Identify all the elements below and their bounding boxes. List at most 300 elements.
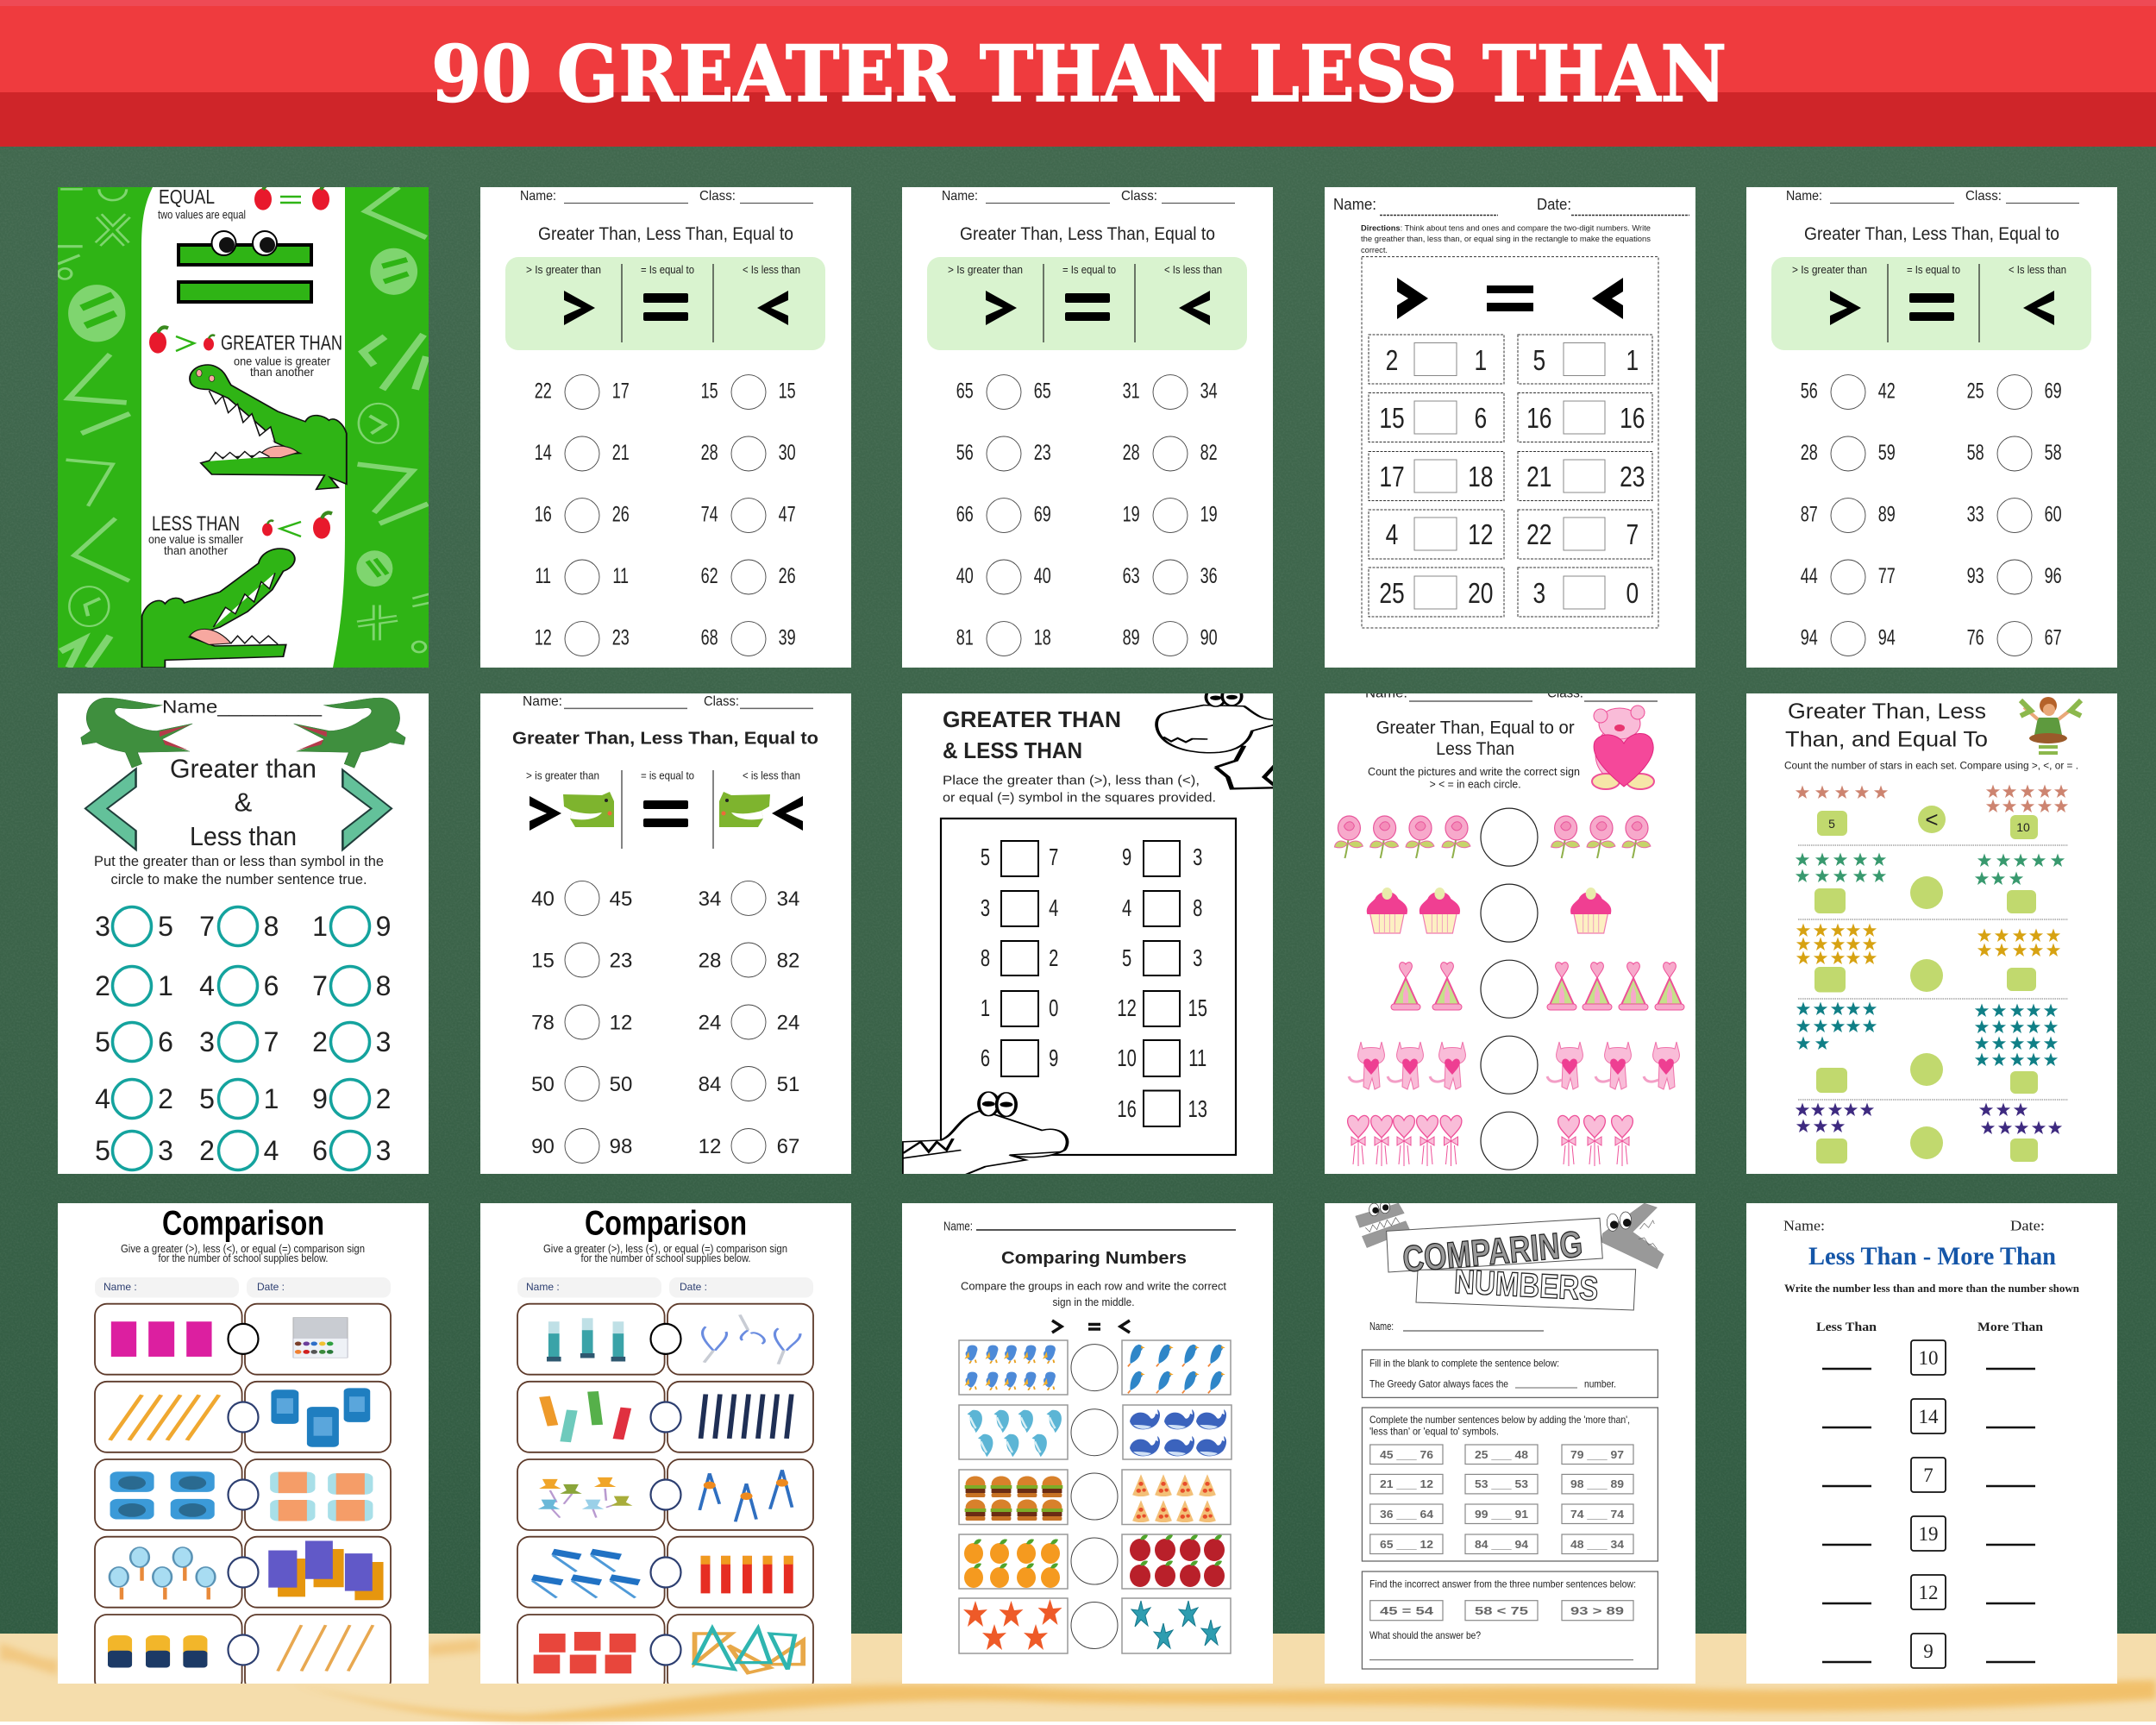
row 4 teal stars [1796, 1002, 2058, 1066]
comparison rows: 6 [312, 1135, 328, 1166]
heading: Greater Than, Less Than, Equal to [1804, 224, 2059, 244]
comparison rows: 21 [612, 440, 630, 465]
name and class line [523, 694, 813, 709]
dashed activity box [1362, 257, 1658, 628]
icon: chevrons [85, 768, 392, 850]
box: number sentences [1362, 1408, 1658, 1561]
row 5 purple stars [1796, 1102, 2062, 1134]
panel: worksheet 1 [480, 187, 851, 668]
box: number sentences: 25 ___ 48 [1475, 1448, 1528, 1461]
comparison rows: 90 [531, 1135, 555, 1158]
instructions: Give a greater (>), less (<), or equal (=) comparison sign [543, 1242, 787, 1255]
dashed activity box: 25 [1379, 578, 1405, 610]
comparison rows: 7 [199, 911, 215, 942]
comparison cards [517, 1304, 813, 1692]
dashed activity box: 17 [1379, 461, 1405, 493]
instructions [1368, 765, 1580, 791]
directions: the greather than, less than, or equal sing in the rectangle to make the equations [1361, 235, 1651, 243]
dashed activity box: 0 [1626, 578, 1639, 610]
answer frame: 6 [981, 1045, 990, 1072]
answer frame: 12 [1117, 995, 1137, 1022]
title: 90 GREATER THAN LESS THAN [431, 28, 1727, 120]
banner with gray alligators [1356, 1201, 1664, 1310]
number boxes [1911, 1340, 1946, 1668]
icon: pink bear with heart [1592, 706, 1654, 789]
directions: Directions: Think about tens and ones and compare the two-digit numbers. Write [1361, 223, 1651, 232]
column headings [1816, 1320, 2044, 1334]
worked example: 10 [2016, 820, 2030, 834]
dashed activity box: 3 [1532, 578, 1545, 610]
comparison rows: 2 [376, 1083, 391, 1114]
worked example [1828, 806, 2030, 834]
comparison rows: 42 [1878, 379, 1896, 403]
comparison rows: 3 [376, 1135, 391, 1166]
comparison rows: 66 [956, 502, 974, 526]
comparison rows: 34 [699, 888, 721, 911]
row 2 green stars [1796, 852, 2065, 885]
comparison rows: 9 [376, 911, 391, 942]
dashed activity box: 5 [1532, 345, 1545, 377]
answer frame: 4 [1122, 895, 1131, 922]
heading [1376, 718, 1575, 759]
comparison rows: 4 [264, 1135, 279, 1166]
box: fill in the blank: The Greedy Gator always faces the [1369, 1378, 1508, 1390]
answer frame: 7 [1049, 844, 1058, 871]
comparison rows: 3 [158, 1135, 173, 1166]
instructions [94, 854, 384, 888]
icons: dolphins and whales [968, 1409, 1226, 1457]
answer circles [228, 1324, 259, 1665]
name and class line: Name: [1365, 686, 1407, 700]
heading: Comparison [585, 1204, 747, 1242]
white central column [141, 187, 345, 668]
comparison rows: 24 [777, 1011, 799, 1035]
name and class line [1786, 189, 2079, 204]
box: number sentences: 74 ___ 74 [1570, 1508, 1625, 1521]
dashed activity box: 18 [1468, 461, 1493, 493]
icons: stars and starfish [963, 1599, 1220, 1650]
comparison rows: 90 [1200, 625, 1218, 649]
name and date line: Date: [1537, 196, 1571, 213]
comparison rows: 44 [1801, 563, 1818, 588]
heading [943, 706, 1121, 763]
icon: top line art crocodile [1156, 687, 1276, 788]
heading: Less Than [1436, 739, 1514, 759]
answer frame: 4 [1049, 895, 1058, 922]
name and class line: Name: [1786, 189, 1822, 204]
dividers [1798, 845, 2068, 1100]
answer frame: 0 [1049, 995, 1058, 1022]
symbol key: < Is less than [2009, 264, 2066, 276]
box: number sentences: 'less than' or 'equal to' symbols. [1369, 1425, 1499, 1437]
wooden table ledge [0, 1634, 2156, 1725]
comparison rows: 26 [779, 563, 796, 588]
less than section: than another [164, 543, 228, 557]
panel: comparing numbers picture groups [902, 1203, 1273, 1684]
comparison rows: 14 [535, 440, 552, 465]
comparison rows: 34 [1200, 379, 1218, 403]
comparison rows: 82 [777, 949, 799, 973]
name and class line: Class: [1547, 686, 1583, 700]
greater than section: one value is greater [234, 354, 330, 367]
comparison rows: 82 [1200, 440, 1218, 465]
heading: Than, and Equal To [1785, 727, 1988, 751]
panel: comparing numbers quiz [1325, 1203, 1695, 1684]
heading: Greater Than, Less Than, Equal to [538, 224, 793, 244]
panel: star counting worksheet [1746, 693, 2117, 1174]
name and class line: Class: [1965, 189, 2002, 204]
answer frame: 11 [1188, 1045, 1206, 1072]
answer tiles and circles [1814, 806, 2038, 1164]
number boxes: 9 [1923, 1640, 1934, 1662]
instructions [943, 773, 1216, 806]
name and date line: Date: [2010, 1218, 2045, 1234]
comparison rows: 12 [610, 1011, 632, 1035]
instructions: Count the pictures and write the correct sign [1368, 765, 1580, 778]
comparison rows: 45 [610, 888, 632, 911]
dashed activity box: 1 [1626, 345, 1639, 377]
comparison rows: 2 [95, 970, 110, 1001]
panel: crocodile single-digit sheet [58, 693, 429, 1174]
comparison rows: 2 [199, 1135, 215, 1166]
greater than section [149, 327, 347, 489]
heading: Comparing Numbers [1001, 1249, 1187, 1268]
comparison rows: 94 [1878, 625, 1896, 649]
comparison rows: 18 [1034, 625, 1051, 649]
comparison rows: 4 [95, 1083, 110, 1114]
box: find the incorrect answer: 45 = 54 [1380, 1604, 1434, 1617]
comparison rows: 40 [1034, 563, 1051, 588]
banner with gray alligators: NUMBERS [1453, 1263, 1599, 1308]
instructions [961, 1280, 1226, 1308]
comparison rows: 28 [1123, 440, 1140, 465]
name and class line [520, 189, 813, 204]
heading: Greater Than, Less [1788, 699, 1986, 724]
directions [1361, 223, 1651, 254]
icons: cats [1349, 1042, 1679, 1089]
comparison rows: 62 [701, 563, 718, 588]
comparison rows: 28 [1801, 440, 1818, 465]
symbol key: > Is greater than [948, 264, 1023, 276]
instructions: sign in the middle. [1052, 1295, 1135, 1308]
answer frame: 15 [1188, 995, 1207, 1022]
comparison rows: 28 [701, 440, 718, 465]
comparison rows: 65 [956, 379, 974, 403]
heading [170, 754, 317, 851]
equal section [158, 184, 331, 302]
name and date line [1333, 196, 1689, 216]
name and date pills: Name : [526, 1281, 560, 1293]
dashed activity box: 16 [1526, 403, 1551, 435]
comparison rows: 30 [779, 440, 796, 465]
comparison rows: 2 [158, 1083, 173, 1114]
instructions [121, 1242, 365, 1264]
comparison rows: 51 [777, 1073, 799, 1096]
heading: Greater Than, Equal to or [1376, 718, 1575, 738]
comparison rows: 56 [1801, 379, 1818, 403]
comparison rows: 8 [376, 970, 391, 1001]
comparison rows: 23 [612, 625, 630, 649]
dashed activity box: 4 [1386, 519, 1398, 551]
answer frame: 9 [1049, 1045, 1058, 1072]
box: find the incorrect answer: What should the answer be? [1369, 1629, 1481, 1641]
instructions: Place the greater than (>), less than (<), [943, 773, 1200, 787]
comparison rows [535, 375, 796, 656]
icon: child figure [2021, 697, 2081, 755]
icons: oranges and apples [964, 1535, 1225, 1588]
comparison rows: 11 [612, 563, 629, 588]
name and date line [1783, 1218, 2045, 1234]
name and date pills [95, 1277, 391, 1297]
box: fill in the blank: number. [1584, 1378, 1616, 1390]
panel: less than more than worksheet [1746, 1203, 2117, 1684]
heading: Greater Than, Less Than, Equal to [960, 224, 1215, 244]
comparison rows: 11 [535, 563, 551, 588]
name line: Name_________ [162, 697, 322, 718]
comparison rows: 78 [531, 1011, 555, 1035]
comparison rows: 68 [701, 625, 718, 649]
number boxes: 19 [1918, 1523, 1939, 1545]
box: number sentences: 48 ___ 34 [1570, 1538, 1625, 1551]
comparison rows [531, 881, 799, 1163]
panel: picture counting worksheet [1325, 686, 1695, 1174]
comparison rows: 15 [779, 379, 796, 403]
less than section [142, 512, 332, 668]
answer frame: 8 [1193, 895, 1202, 922]
comparison rows: 24 [699, 1011, 721, 1035]
answer circles [1481, 808, 1538, 1170]
worked example: < [1925, 806, 1939, 832]
comparison rows: 69 [1034, 502, 1051, 526]
answer frame: 8 [981, 945, 990, 972]
heading: Less than [190, 821, 297, 851]
number boxes: 10 [1918, 1347, 1939, 1369]
answer circles [1071, 1345, 1118, 1649]
dashed activity box: 6 [1474, 403, 1487, 435]
dashed activity box: 21 [1526, 461, 1551, 493]
comparison rows: 39 [779, 625, 796, 649]
instructions: Count the number of stars in each set. Compare using >, <, or = . [1784, 759, 2078, 771]
answer circles [650, 1324, 681, 1665]
less than section: LESS THAN [152, 512, 240, 536]
comparison rows: 19 [1123, 502, 1140, 526]
comparison rows: 9 [312, 1083, 328, 1114]
comparison rows: 19 [1200, 502, 1218, 526]
heading: Greater Than, Less Than, Equal to [512, 730, 818, 749]
comparison rows: 89 [1878, 502, 1896, 526]
dashed activity box: 12 [1468, 519, 1493, 551]
name line: Name: [943, 1220, 973, 1234]
dashed activity box: 22 [1526, 519, 1551, 551]
comparison rows: 25 [1967, 379, 1984, 403]
comparison rows: 3 [95, 911, 110, 942]
icons: supplies [532, 1314, 803, 1673]
comparison rows: 94 [1801, 625, 1818, 649]
comparison rows: 5 [95, 1026, 110, 1057]
picture boxes [959, 1340, 1232, 1653]
comparison rows: 60 [2045, 502, 2062, 526]
symbol key: < Is less than [743, 264, 800, 276]
comparison rows: 63 [1123, 563, 1140, 588]
name and date line: Name: [1333, 196, 1376, 213]
answer frame: 5 [1122, 945, 1131, 972]
answer frame: 5 [981, 844, 990, 871]
name and class line [942, 189, 1235, 204]
comparison rows: 3 [376, 1026, 391, 1057]
comparison rows: 22 [535, 379, 552, 403]
name and date pills: Date : [257, 1281, 285, 1293]
comparison rows: 16 [535, 502, 552, 526]
comparison rows: 23 [610, 949, 632, 973]
comparison rows: 1 [312, 911, 328, 942]
comparison rows: 67 [777, 1135, 799, 1158]
icons: cupcakes [1367, 888, 1611, 933]
name line: Name: [1369, 1320, 1394, 1333]
name and date line: Name: [1783, 1218, 1825, 1234]
comparison rows: 93 [1967, 563, 1984, 588]
panel: worksheet 4 [1746, 187, 2117, 668]
answer frame: 3 [1193, 844, 1202, 871]
dashed activity box: 23 [1620, 461, 1645, 493]
comparison rows: 40 [956, 563, 974, 588]
symbol key [505, 257, 825, 350]
instructions: circle to make the number sentence true. [110, 872, 367, 888]
equal section: two values are equal [158, 207, 246, 221]
box: number sentences: 65 ___ 12 [1380, 1538, 1433, 1551]
comparison rows: 15 [701, 379, 718, 403]
icons: heart lollipops [1348, 1115, 1633, 1166]
equal section: EQUAL [159, 185, 215, 208]
comparison rows: 4 [199, 970, 215, 1001]
comparison rows [956, 375, 1218, 656]
comparison rows: 47 [779, 502, 796, 526]
box: number sentences: 21 ___ 12 [1380, 1477, 1433, 1490]
comparison rows: 6 [264, 970, 279, 1001]
box: find the incorrect answer: Find the incorrect answer from the three number sentences below: [1369, 1578, 1636, 1590]
comparison rows: 1 [264, 1083, 279, 1114]
directions: correct. [1361, 246, 1388, 254]
less than section: one value is smaller [148, 532, 243, 546]
comparison rows: 77 [1878, 563, 1896, 588]
symbol key: = Is equal to [1062, 264, 1116, 276]
box: number sentences: 99 ___ 91 [1475, 1508, 1528, 1521]
comparison rows: 98 [610, 1135, 632, 1158]
answer frame: 3 [1193, 945, 1202, 972]
comparison rows: 89 [1123, 625, 1140, 649]
dashed activity box: 1 [1474, 345, 1487, 377]
comparison rows: 6 [158, 1026, 173, 1057]
instructions: Compare the groups in each row and write the correct [961, 1280, 1226, 1292]
comparison rows: 65 [1034, 379, 1051, 403]
icons: roses [1334, 816, 1651, 858]
comparison rows: 76 [1967, 625, 1984, 649]
header banner [0, 0, 2156, 147]
icons: burgers and pizza [965, 1474, 1216, 1522]
comparison rows: 12 [699, 1135, 721, 1158]
comparison rows: 3 [199, 1026, 215, 1057]
name and class line [1365, 686, 1658, 701]
symbol key [1052, 1320, 1130, 1333]
instructions: Give a greater (>), less (<), or equal (=) comparison sign [121, 1242, 365, 1255]
symbol key with crocodile heads: = is equal to [641, 770, 694, 782]
comparison rows: 81 [956, 625, 974, 649]
name and class line: Name: [523, 694, 562, 709]
answer frame: 16 [1117, 1096, 1137, 1123]
heading: & [235, 787, 253, 818]
answer frame: 13 [1188, 1096, 1207, 1123]
heading: Less Than - More Than [1808, 1242, 2056, 1270]
instructions: or equal (=) symbol in the squares provided. [943, 791, 1216, 806]
name and class line: Class: [704, 694, 739, 709]
box: find the incorrect answer: 58 < 75 [1475, 1604, 1528, 1617]
comparison rows: 96 [2045, 563, 2062, 588]
comparison rows: 59 [1878, 440, 1896, 465]
symbol key [1771, 257, 2091, 350]
comparison rows: 40 [531, 888, 555, 911]
name and class line: Name: [520, 189, 556, 204]
comparison rows: 1 [158, 970, 173, 1001]
comparison rows: 28 [699, 949, 721, 973]
comparison rows: 12 [535, 625, 552, 649]
instructions: for the number of school supplies below. [581, 1251, 750, 1264]
symbol key: > Is greater than [526, 264, 601, 276]
comparison cards [95, 1304, 391, 1692]
comparison rows: 8 [264, 911, 279, 942]
comparison rows: 69 [2045, 379, 2062, 403]
answer frame: 1 [981, 995, 990, 1022]
box: find the incorrect answer: 93 > 89 [1570, 1604, 1624, 1617]
box: number sentences: Complete the number sentences below by adding the 'more than', [1369, 1414, 1630, 1426]
heading: GREATER THAN [943, 706, 1121, 732]
comparison rows: 58 [1967, 440, 1984, 465]
column headings: Less Than [1816, 1320, 1877, 1334]
answer frame: 10 [1117, 1045, 1137, 1072]
name and date pills: Date : [680, 1281, 707, 1293]
symbol key with crocodile heads: < is less than [743, 770, 800, 782]
instructions: > < = in each circle. [1430, 778, 1521, 791]
heading: Greater than [170, 754, 317, 783]
answer frame: 9 [1122, 844, 1131, 871]
name and date pills [517, 1277, 813, 1297]
icon: bottom line art crocodile [902, 1092, 1068, 1176]
heading: & LESS THAN [943, 737, 1082, 763]
box: find the incorrect answer [1362, 1571, 1658, 1669]
box: number sentences: 98 ___ 89 [1570, 1477, 1624, 1490]
answer frame: 2 [1049, 945, 1058, 972]
comparison rows: 74 [701, 502, 718, 526]
comparison rows: 56 [956, 440, 974, 465]
panel: school supplies comparison B [480, 1203, 851, 1684]
comparison rows [95, 907, 391, 1170]
number boxes: 14 [1918, 1406, 1939, 1427]
number boxes: 7 [1923, 1465, 1934, 1486]
instructions: for the number of school supplies below. [159, 1251, 328, 1264]
worked example: 5 [1828, 817, 1835, 831]
symbol key: = Is equal to [641, 264, 694, 276]
comparison rows: 5 [95, 1135, 110, 1166]
panel: crocodile poster [58, 185, 429, 668]
box: number sentences: 36 ___ 64 [1380, 1508, 1434, 1521]
name and date pills: Name : [103, 1281, 137, 1293]
comparison rows: 67 [2045, 625, 2062, 649]
box: number sentences: 79 ___ 97 [1570, 1448, 1624, 1461]
box: number sentences: 84 ___ 94 [1475, 1538, 1529, 1551]
column headings: More Than [1977, 1320, 2044, 1334]
comparison rows: 23 [1034, 440, 1051, 465]
comparison rows: 33 [1967, 502, 1984, 526]
heading: Comparison [162, 1204, 324, 1242]
instructions: Write the number less than and more than the number shown [1784, 1282, 2080, 1295]
